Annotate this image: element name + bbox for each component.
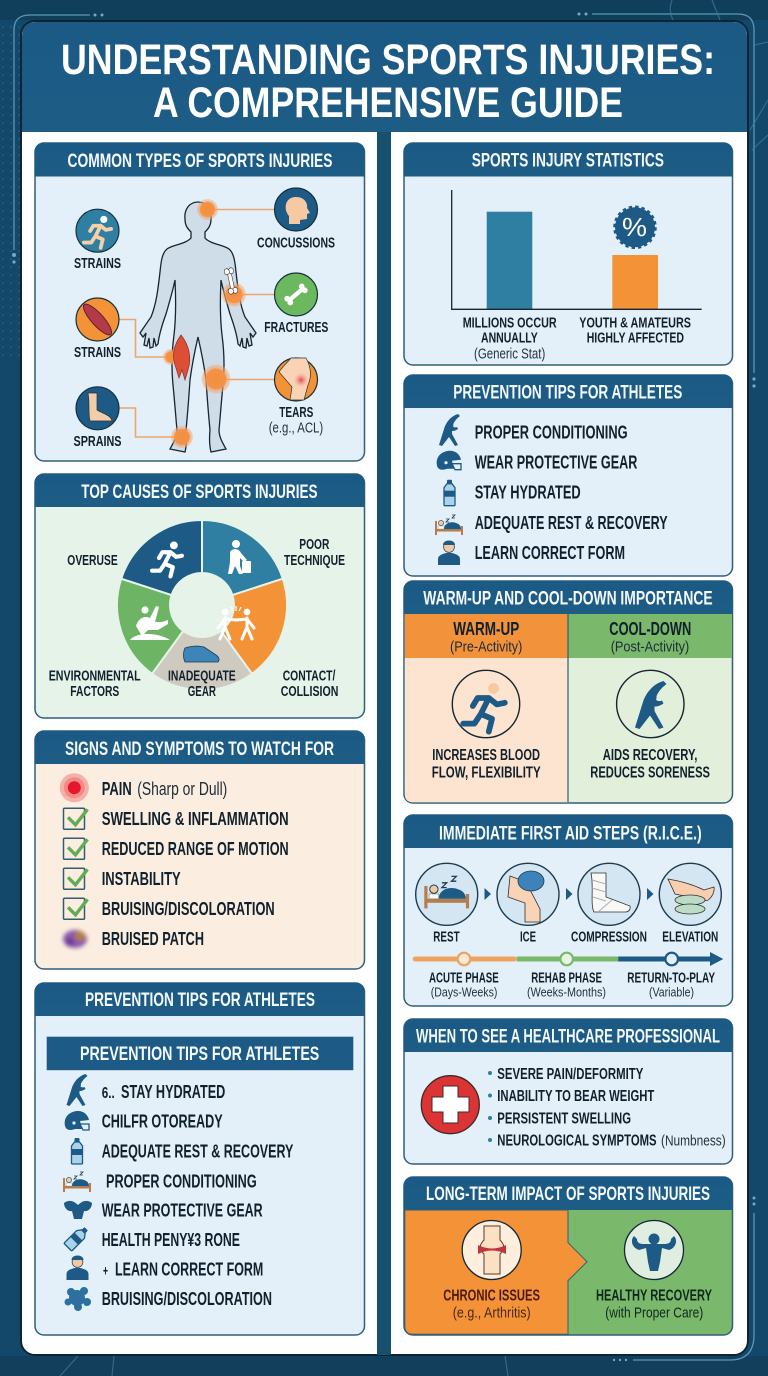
body silhouette (140, 202, 256, 452)
column: cool-down: AIDS RECOVERY, (603, 747, 697, 764)
symptom: BRUISED PATCH (102, 929, 204, 949)
step labels: REST (433, 930, 460, 946)
icon: fracture bone (274, 273, 318, 316)
column: warm-up: WARM-UP (453, 619, 519, 639)
column: cool-down: (Post-Activity) (611, 639, 689, 656)
bar labels: ANNUALLY (481, 331, 538, 347)
labels: FACTORS (70, 684, 120, 700)
bar labels: YOUTH & AMATEURS (579, 315, 691, 331)
icon: helmet (437, 451, 461, 470)
panel: first aid R.I.C.E. (404, 815, 732, 1006)
labels: POOR (299, 537, 330, 553)
phase labels: (Weeks-Months) (527, 985, 606, 1000)
tip: CHILFR OTOREADY (102, 1112, 223, 1132)
panel: common types of sports injuries (35, 143, 364, 461)
step arrow (484, 888, 491, 900)
icon: checkbox (64, 808, 88, 829)
label: CHRONIC ISSUES (443, 1288, 540, 1305)
panel: statistics (404, 143, 732, 365)
bar labels: MILLIONS OCCUR (463, 315, 557, 331)
icon: person (66, 1256, 88, 1280)
icon: bottle (444, 480, 455, 506)
label (596, 1288, 712, 1321)
icon: percent badge: % (622, 212, 647, 242)
phase labels (429, 970, 715, 1000)
icon: bed (63, 1172, 91, 1192)
symptom: INSTABILITY (102, 869, 181, 889)
icon: checkbox (64, 868, 88, 889)
panel: when to see a healthcare professional (404, 1019, 732, 1164)
tip: LEARN CORRECT FORM (115, 1260, 263, 1280)
phase labels: RETURN-TO-PLAY (627, 970, 715, 986)
step arrow (566, 888, 572, 900)
label: TEARS (279, 405, 314, 421)
label: SPRAINS (74, 434, 122, 450)
icon: arthritic joint (462, 1220, 521, 1280)
recovery timeline (413, 952, 723, 966)
icon: poor technique lifter (228, 540, 251, 574)
tip: + (103, 1264, 108, 1280)
icon: pain dot (60, 773, 89, 802)
panel: prevention tips (right) (404, 375, 732, 576)
heading: SPORTS INJURY STATISTICS (472, 150, 664, 172)
symptom: pain: (Sharp or Dull) (137, 779, 227, 799)
column: warm-up: FLOW, FLEXIBILITY (432, 764, 541, 781)
tip: PROPER CONDITIONING (475, 422, 628, 442)
step labels (433, 930, 718, 946)
panel: top causes of sports injuries (35, 474, 364, 718)
icon: ankle sprain (76, 387, 119, 430)
tip (102, 1082, 225, 1102)
inner banner (47, 1037, 353, 1070)
icon: compression (578, 863, 640, 925)
heading: COMMON TYPES OF SPORTS INJURIES (68, 150, 332, 172)
orange side with arrow (405, 1210, 587, 1334)
symptom: BRUISING/DISCOLORATION (102, 899, 275, 919)
icon: stretch (66, 1074, 88, 1106)
icon: stretching figure (617, 670, 684, 738)
icon: runner (452, 670, 520, 738)
column: cool-down: REDUCES SORENESS (590, 764, 710, 781)
icon: medical cross (421, 1076, 479, 1134)
label: HEALTHY RECOVERY (596, 1288, 712, 1305)
step labels: ICE (520, 930, 536, 946)
donut chart (117, 520, 287, 690)
labels: INADEQUATE (168, 668, 236, 684)
icon: stretch (439, 414, 460, 446)
labels: CONTACT/ (283, 668, 335, 684)
title line 2: A COMPREHENSIVE GUIDE (153, 79, 623, 127)
bullet list: (Numbness) (661, 1134, 726, 1150)
symptom: pain (102, 779, 227, 799)
step arrow (647, 888, 654, 900)
labels: OVERUSE (67, 553, 118, 569)
step labels: COMPRESSION (571, 930, 647, 946)
bar labels: (Generic Stat) (474, 346, 545, 362)
symptom: REDUCED RANGE OF MOTION (102, 839, 289, 859)
label: (with Proper Care) (605, 1305, 703, 1321)
icon: runner strain (76, 209, 119, 252)
symptom: pain: PAIN (102, 779, 132, 799)
heading: PREVENTION TIPS FOR ATHLETES (85, 989, 315, 1011)
tip: LEARN CORRECT FORM (475, 543, 625, 563)
symptom: SWELLING & INFLAMMATION (102, 809, 289, 829)
column: warm-up: (Pre-Activity) (450, 639, 522, 656)
icon: bottle (72, 1138, 82, 1164)
icon: concussion head (274, 188, 318, 231)
panel: warm-up and cool-down (404, 581, 732, 803)
labels: ENVIRONMENTAL (49, 668, 141, 684)
column: warm-up: INCREASES BLOOD (432, 747, 540, 764)
icon: tilted bottle (64, 1225, 90, 1251)
phase labels: (Days-Weeks) (431, 985, 497, 1000)
heading: SIGNS AND SYMPTOMS TO WATCH FOR (65, 738, 334, 760)
bar chart (452, 190, 702, 309)
icon: bruise (63, 930, 87, 948)
icon: ice (497, 863, 559, 925)
tip (103, 1260, 263, 1280)
phase labels: ACUTE PHASE (429, 970, 499, 986)
tip: HEALTH PENY¥3 RONE (102, 1230, 240, 1250)
column: cool-down (568, 614, 732, 802)
title banner (22, 22, 747, 132)
bullet list: NEUROLOGICAL SYMPTOMS (497, 1133, 657, 1150)
tip: STAY HYDRATED (121, 1082, 225, 1102)
panel: signs and symptoms (35, 731, 364, 969)
tip: ADEQUATE REST & RECOVERY (475, 513, 668, 533)
bullet list: INABILITY TO BEAR WEIGHT (497, 1088, 655, 1105)
icon: percent badge (614, 207, 656, 248)
injury hotspots (163, 199, 246, 448)
phase labels: REHAB PHASE (531, 970, 602, 986)
bar labels (463, 315, 691, 362)
bullet list (488, 1066, 726, 1150)
column: cool-down: COOL-DOWN (609, 619, 691, 639)
label: (e.g., Arthritis) (453, 1305, 531, 1321)
label: STRAINS (74, 345, 121, 361)
icon: elevation (659, 863, 721, 925)
icon: collision figures (218, 606, 254, 639)
bar labels: HIGHLY AFFECTED (587, 331, 684, 347)
tip: WEAR PROTECTIVE GEAR (102, 1201, 263, 1221)
icon: slipping figure (130, 606, 170, 640)
tip: 6.. (102, 1085, 115, 1102)
icon: puzzle splash (64, 1287, 91, 1311)
label: FRACTURES (264, 320, 329, 336)
connector lines (119, 210, 275, 437)
labels: TECHNIQUE (284, 553, 345, 569)
icon: bed (435, 515, 463, 535)
icon: knee tear (274, 358, 318, 401)
tip: WEAR PROTECTIVE GEAR (475, 452, 637, 472)
panel: long-term impact (404, 1177, 732, 1335)
label note: (e.g., ACL) (269, 421, 323, 437)
tip: STAY HYDRATED (475, 482, 581, 502)
step labels: ELEVATION (662, 930, 718, 946)
icon: rest (416, 863, 478, 925)
bullet list: PERSISTENT SWELLING (497, 1110, 631, 1127)
bullet list: SEVERE PAIN/DEFORMITY (497, 1066, 644, 1083)
heading: TOP CAUSES OF SPORTS INJURIES (81, 481, 318, 503)
icon: checkbox (64, 838, 88, 859)
icon: checkbox (64, 898, 88, 919)
icon: shoulder pads (64, 1201, 92, 1219)
icon: runner overuse (152, 541, 182, 576)
column: warm-up (405, 614, 568, 802)
icon: shoe (184, 646, 219, 662)
inner banner: PREVENTION TIPS FOR ATHLETES (80, 1043, 319, 1065)
label (443, 1288, 540, 1321)
phase labels: (Variable) (649, 985, 694, 1000)
icon: helmet (65, 1111, 89, 1130)
label: STRAINS (74, 256, 121, 272)
label: CONCUSSIONS (257, 236, 335, 252)
labels: COLLISION (281, 684, 338, 700)
tip: ADEQUATE REST & RECOVERY (102, 1142, 293, 1162)
tip: PROPER CONDITIONING (106, 1171, 257, 1191)
labels (49, 537, 345, 700)
tip: BRUISING/DISCOLORATION (102, 1289, 272, 1309)
panel: prevention tips (left) (35, 983, 364, 1335)
icon: coach (438, 540, 460, 565)
icon: muscle strain (76, 298, 119, 341)
icon: healthy muscle figure (624, 1220, 684, 1280)
labels: GEAR (188, 684, 216, 700)
